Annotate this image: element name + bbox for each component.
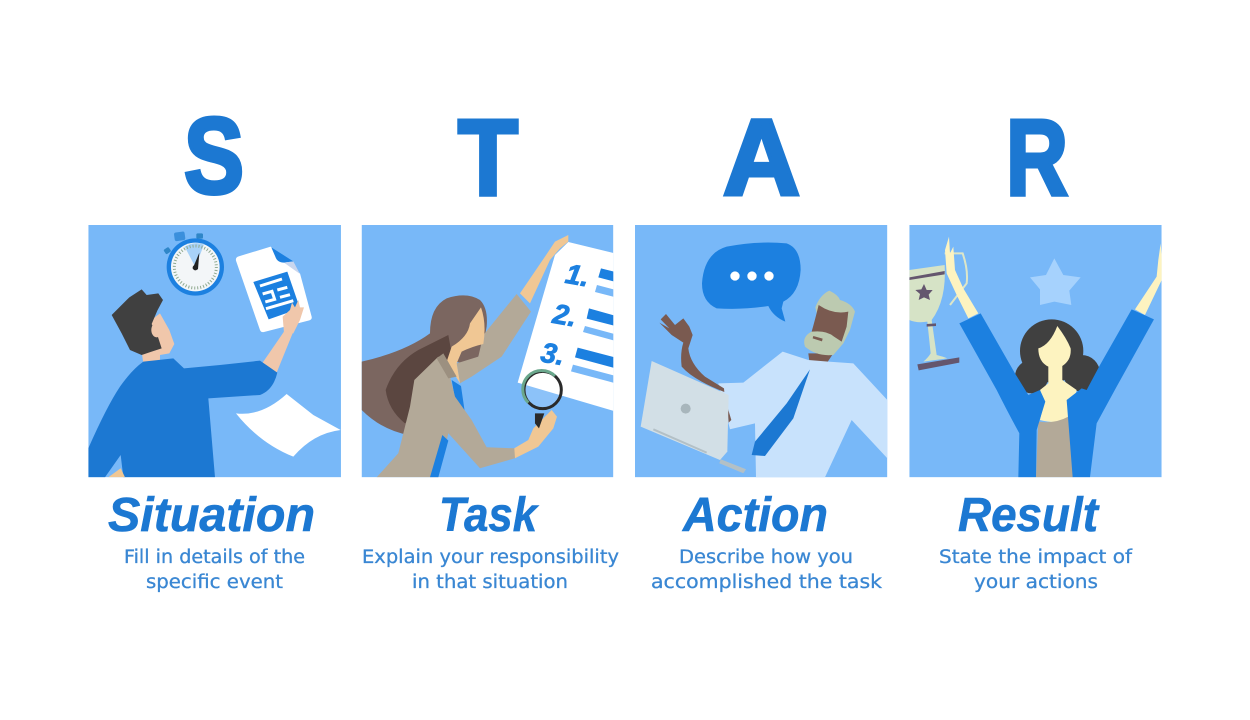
text: action description: accomplished the task <box>651 572 882 593</box>
icon: flying paper <box>236 394 341 457</box>
woman figure <box>945 237 1163 477</box>
text: situation description: Fill in details of the <box>124 547 305 568</box>
letter T: T <box>458 96 518 218</box>
panel: task illustration <box>362 225 622 477</box>
woman figure <box>362 235 568 477</box>
letter S: S <box>184 95 244 216</box>
panel: action illustration <box>635 225 887 477</box>
letter A: A <box>723 96 800 218</box>
icon: star <box>1030 258 1081 305</box>
heading: Action: Action <box>682 489 828 542</box>
text: task description <box>362 547 619 593</box>
icon: magnifying glass <box>523 370 561 428</box>
icon: numbered list sheet: 3. <box>539 337 567 371</box>
text: result description: your actions <box>974 572 1098 593</box>
heading: Task: Task <box>439 489 539 542</box>
icon: stopwatch <box>163 231 224 296</box>
text: result description: State the impact of <box>939 547 1133 568</box>
text: situation description: specific event <box>146 572 283 593</box>
letter R: R <box>1006 96 1068 218</box>
icon: trophy <box>909 253 967 370</box>
icon: numbered list sheet: 2. <box>550 298 579 333</box>
heading: Situation: Situation <box>108 489 315 542</box>
text: action description: Describe how you <box>679 547 853 568</box>
icon: laptop <box>641 361 746 473</box>
panel: situation illustration <box>88 225 341 477</box>
heading: Result: Result <box>958 489 1100 542</box>
panel: result illustration <box>909 225 1163 477</box>
STAR infographic <box>88 116 1162 592</box>
text: result description <box>939 547 1133 593</box>
text: task description: in that situation <box>412 572 568 593</box>
man figure <box>88 289 304 477</box>
icon: numbered list sheet <box>518 242 622 413</box>
text: situation description <box>124 547 305 593</box>
icon: document <box>236 247 312 332</box>
text: action description <box>651 547 882 593</box>
icon: numbered list sheet: 1. <box>563 258 592 293</box>
text: task description: Explain your responsibility <box>362 547 619 568</box>
man figure <box>659 291 887 477</box>
icon: speech bubble <box>702 243 801 322</box>
